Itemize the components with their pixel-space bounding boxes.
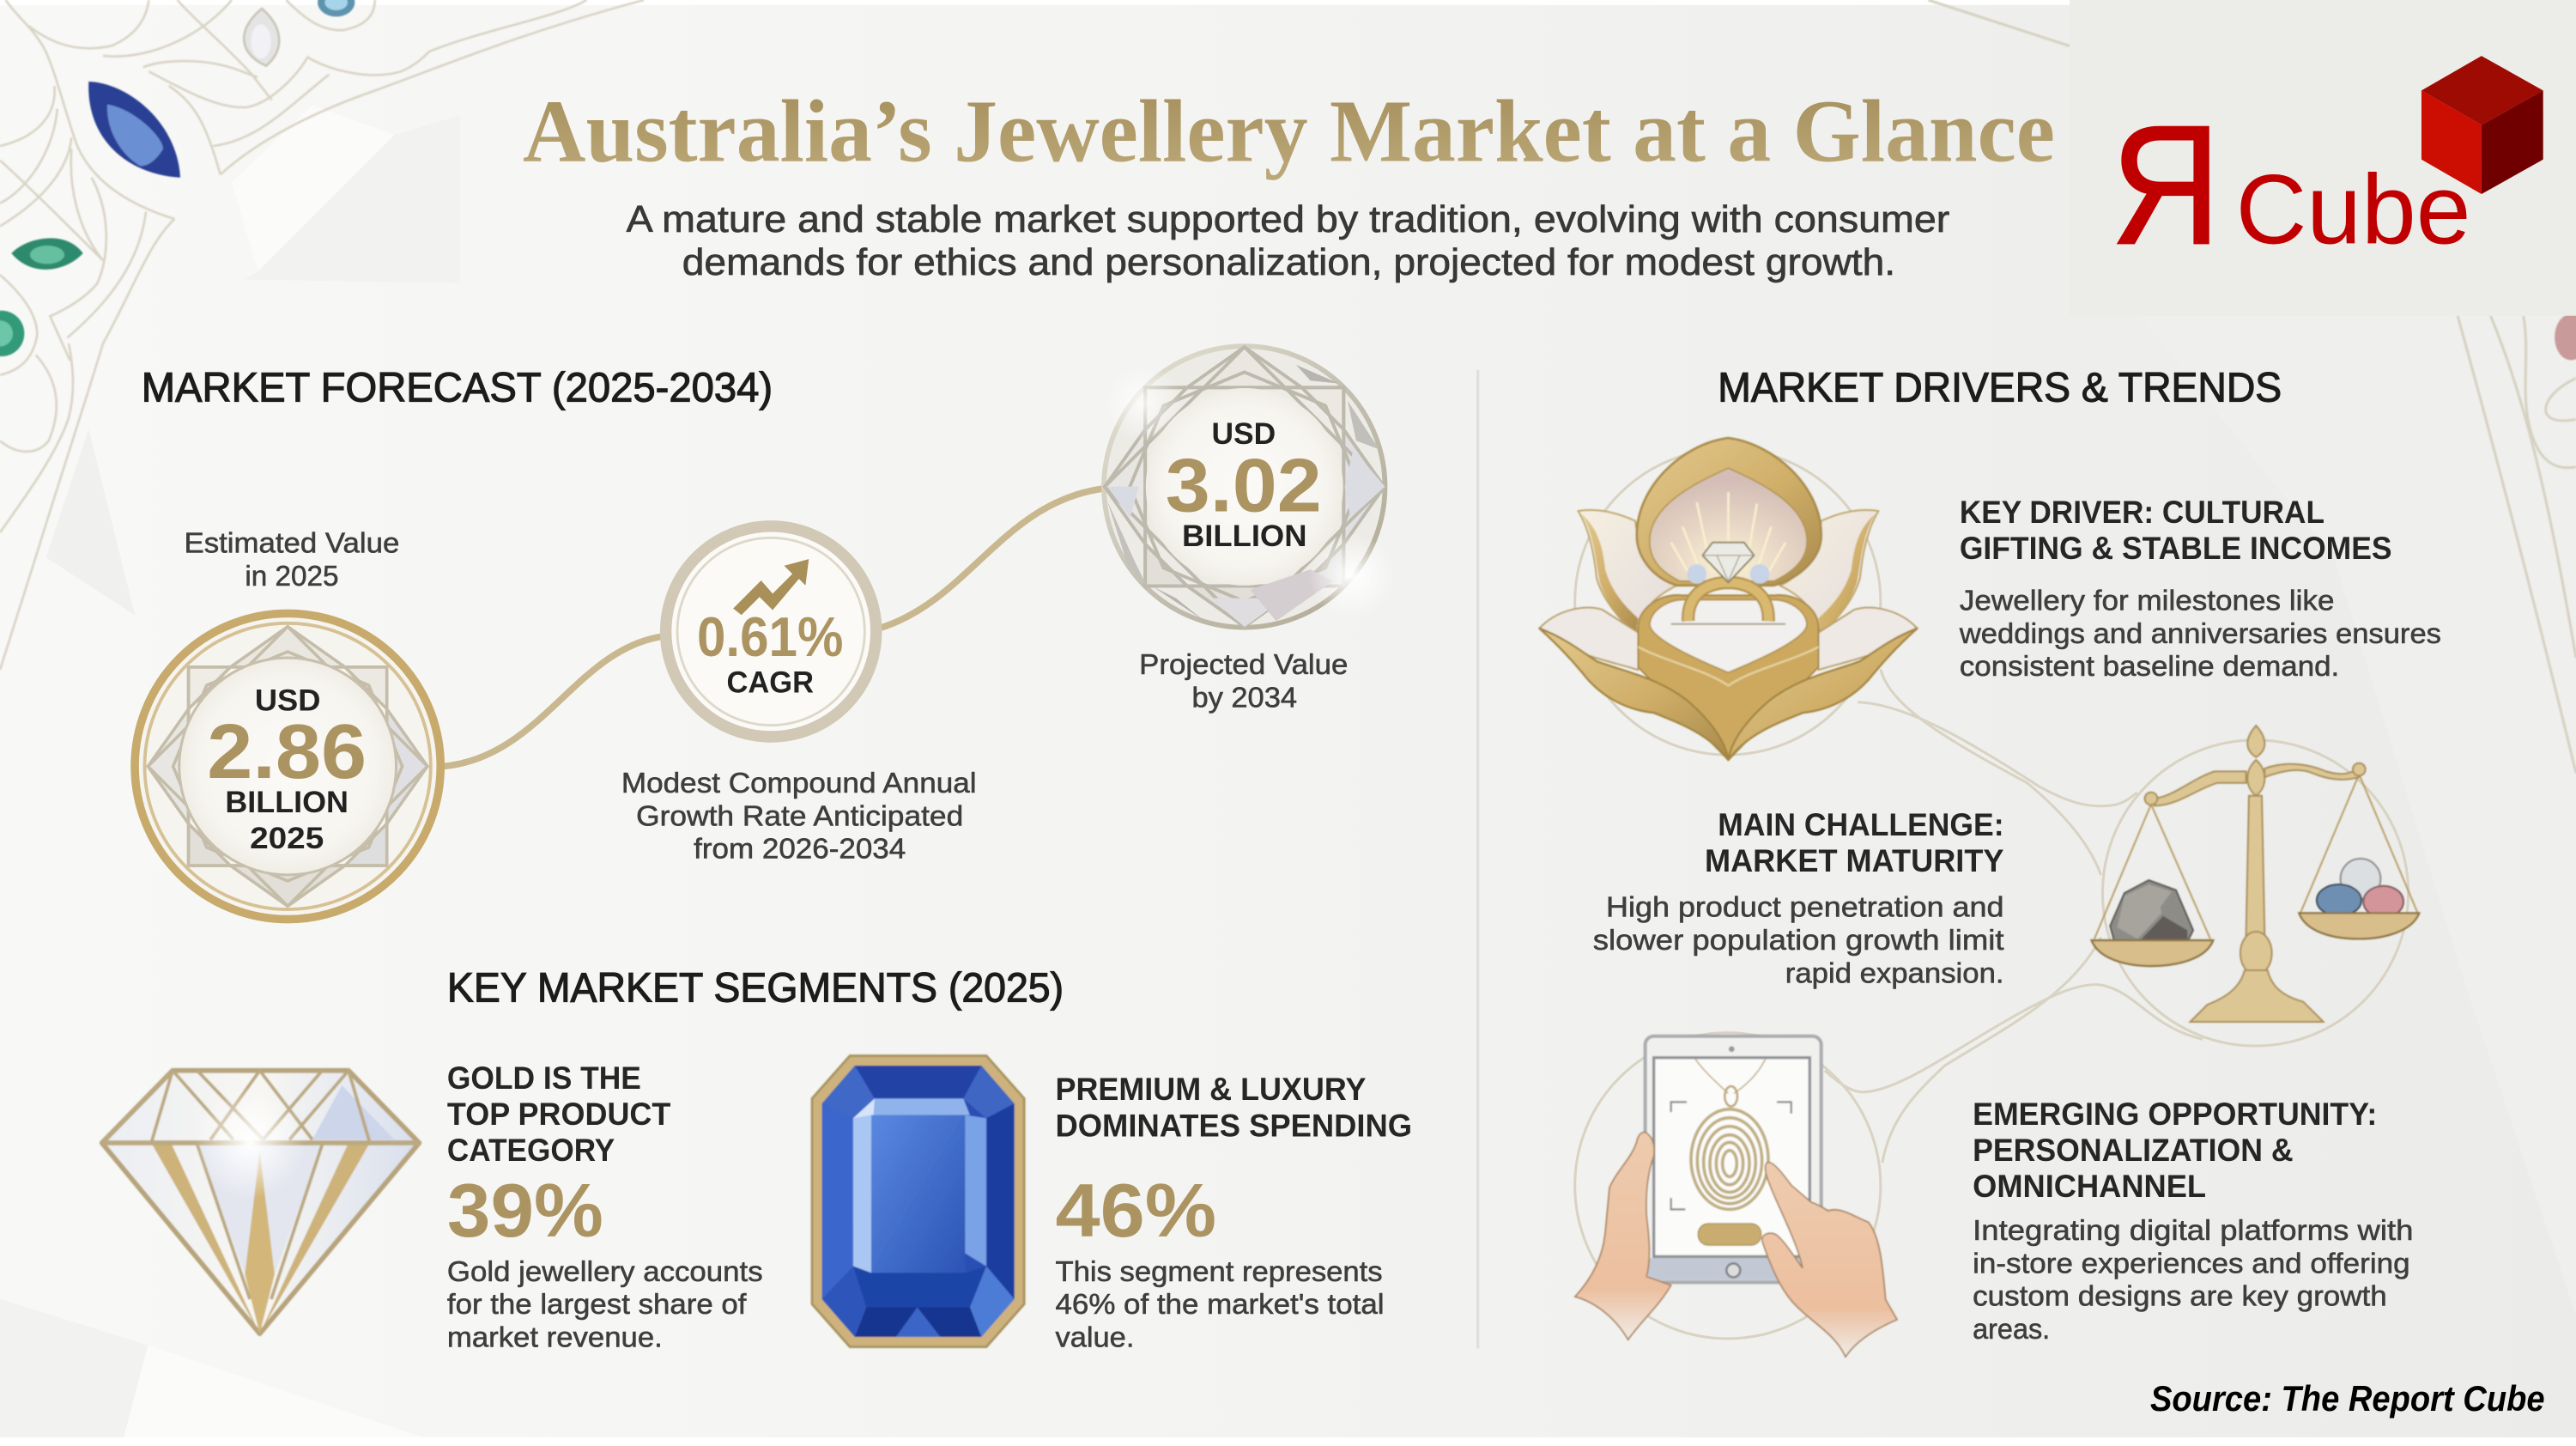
logo panel	[2070, 0, 2576, 316]
logo wordmark: Cube	[2236, 155, 2470, 264]
subtitle: A mature and stable market supported by tradition, evolving with consumer	[627, 199, 1949, 240]
text: key driver: KEY DRIVER: CULTURAL	[1960, 494, 2324, 530]
label: estimated value: Estimated Value	[184, 527, 399, 559]
text: key driver: GIFTING & STABLE INCOMES	[1960, 530, 2392, 566]
decorative gem corner: top left	[0, 0, 644, 670]
divider	[1477, 370, 1479, 1348]
pans	[2092, 913, 2419, 966]
back petals	[1539, 608, 1917, 670]
subtitle: demands for ethics and personalization, projected for modest growth.	[682, 242, 1895, 283]
segment text: gold: market revenue.	[447, 1322, 663, 1354]
text: main challenge: slower population growth limit	[1593, 925, 2004, 957]
necklace	[1695, 1059, 1766, 1106]
segment text: premium: 46%	[1056, 1168, 1216, 1253]
segment text: gold: Gold jewellery accounts	[447, 1256, 763, 1288]
text: main challenge: MAIN CHALLENGE:	[1718, 806, 2004, 842]
logo wordmark: Я	[2111, 89, 2221, 279]
caption: CAGR: Modest Compound Annual	[621, 768, 977, 799]
gem: rose	[2555, 314, 2576, 360]
text: key driver: weddings and anniversaries ensures	[1959, 618, 2441, 650]
stones	[2317, 859, 2403, 917]
circle: 2034 value	[1103, 346, 1394, 628]
circle: CAGR: 0.61%	[697, 605, 843, 668]
icon: growth arrow	[733, 559, 809, 615]
right hand	[1762, 1162, 1897, 1357]
button	[1698, 1224, 1761, 1245]
subtitle	[627, 199, 1949, 283]
label: estimated value	[184, 527, 399, 592]
circle: 2025 value: 2025	[250, 821, 324, 855]
circle: CAGR: CAGR	[726, 665, 814, 699]
source note: Source: The Report Cube	[2150, 1378, 2545, 1419]
segment text: gold: GOLD IS THE	[447, 1060, 641, 1096]
circle: 2034 value: BILLION	[1182, 519, 1307, 553]
scan corners	[1671, 1102, 1791, 1209]
segment text: gold: CATEGORY	[447, 1132, 615, 1168]
text: emerging opportunity: in-store experiences and offering	[1973, 1248, 2410, 1279]
caption: projected value: Projected Value	[1139, 649, 1348, 681]
icon: ring in lotus box	[1539, 438, 1917, 760]
heading: market forecast: MARKET FORECAST (2025-2034)	[142, 365, 773, 410]
icon: balance scales	[2092, 726, 2419, 1022]
heading: market drivers: MARKET DRIVERS & TRENDS	[1718, 365, 2282, 410]
icon: diamond	[102, 1071, 419, 1334]
circle: 2025 value: USD	[255, 683, 320, 717]
left hand	[1575, 1132, 1671, 1340]
circle: 2025 value: 2.86	[207, 709, 367, 795]
thin connector lines	[1575, 449, 2409, 1339]
gem: pale marquise	[244, 9, 279, 66]
segment text: gold: TOP PRODUCT	[447, 1096, 671, 1132]
caption: projected value: by 2034	[1191, 683, 1297, 714]
circle: 2025 value	[135, 613, 440, 920]
decorative corner: right	[1928, 0, 2576, 773]
segment text: premium	[1056, 1071, 1412, 1354]
segment text: gold: 39%	[447, 1168, 603, 1253]
text: emerging opportunity: EMERGING OPPORTUNITY:	[1973, 1096, 2377, 1132]
text: main challenge: rapid expansion.	[1785, 957, 2004, 989]
gem: green edge	[0, 311, 24, 356]
stand and beam	[2145, 726, 2366, 1022]
icon: sapphire	[812, 1056, 1024, 1347]
gold front petals	[1539, 629, 1917, 760]
ring	[1671, 543, 1785, 624]
segment text: gold: for the largest share of	[447, 1289, 747, 1321]
segment text: gold	[447, 1060, 763, 1354]
text: key driver: consistent baseline demand.	[1960, 651, 2339, 683]
circle: 2025 value: BILLION	[225, 785, 349, 819]
circle: 2034 value: USD	[1211, 416, 1276, 451]
icon: tablet with fingerprint and hands	[1575, 1036, 1897, 1357]
segment text: premium: PREMIUM & LUXURY	[1056, 1071, 1367, 1107]
caption: CAGR: Growth Rate Anticipated	[636, 800, 963, 832]
text: emerging opportunity: PERSONALIZATION &	[1973, 1132, 2294, 1168]
text: emerging opportunity	[1973, 1096, 2413, 1346]
label: estimated value: in 2025	[245, 561, 339, 592]
circle: 2034 value: 3.02	[1166, 443, 1322, 528]
title: Australia’s Jewellery Market at a Glance	[523, 83, 2055, 181]
caption: CAGR	[621, 768, 977, 866]
text: emerging opportunity: areas.	[1973, 1314, 2050, 1346]
growth connector line	[444, 489, 1105, 766]
gem: blue marquise	[88, 82, 180, 178]
heading: key market segments: KEY MARKET SEGMENTS (2025)	[447, 965, 1064, 1011]
fingerprint	[1691, 1109, 1768, 1209]
text: main challenge	[1593, 806, 2004, 989]
segment text: premium: value.	[1056, 1322, 1134, 1354]
text: emerging opportunity: OMNICHANNEL	[1973, 1168, 2206, 1204]
rock	[2110, 880, 2193, 942]
caption: CAGR: from 2026-2034	[694, 834, 906, 866]
text: emerging opportunity: Integrating digital platforms with	[1973, 1215, 2413, 1247]
text: emerging opportunity: custom designs are key growth	[1973, 1281, 2387, 1313]
caption: projected value	[1139, 649, 1348, 714]
text: key driver	[1959, 494, 2441, 683]
text: key driver: Jewellery for milestones like	[1960, 586, 2334, 617]
tablet body	[1646, 1036, 1821, 1282]
text: main challenge: MARKET MATURITY	[1705, 842, 2004, 878]
segment text: premium: This segment represents	[1056, 1256, 1383, 1288]
icon: red cube	[2421, 56, 2543, 194]
circle: CAGR	[666, 526, 876, 737]
segment text: premium: 46% of the market's total	[1056, 1289, 1385, 1321]
gem: green	[11, 238, 83, 270]
logo wordmark	[2111, 89, 2470, 279]
text: main challenge: High product penetration and	[1606, 892, 2004, 924]
side petals	[1578, 510, 1878, 635]
segment text: premium: DOMINATES SPENDING	[1056, 1107, 1412, 1143]
gem: blue top	[318, 0, 355, 16]
cushion	[1638, 595, 1818, 760]
box lid	[1637, 438, 1821, 586]
